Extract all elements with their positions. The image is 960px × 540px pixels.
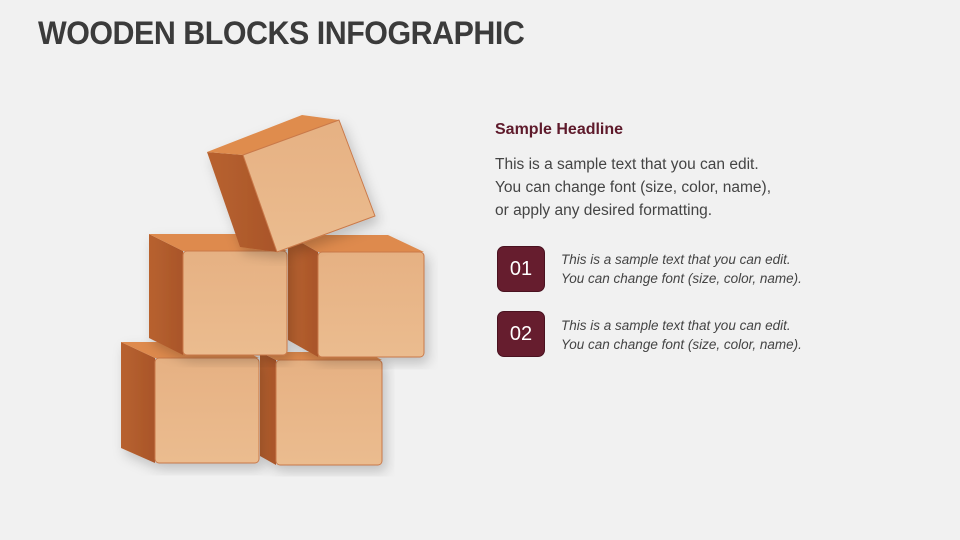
badge 02 — [497, 311, 545, 357]
item 02 — [497, 311, 802, 357]
body text: This is a sample text that you can edit. — [495, 156, 759, 173]
item 01 — [497, 246, 802, 292]
body text: or apply any desired formatting. — [495, 202, 712, 219]
text 02 — [561, 318, 802, 352]
text 01 — [561, 252, 802, 286]
block: middle left — [149, 234, 287, 355]
block: bottom left — [121, 342, 259, 463]
text 01: You can change font (size, color, name). — [561, 271, 802, 286]
badge 02: 02 — [510, 323, 532, 345]
text 01: This is a sample text that you can edit. — [561, 252, 791, 267]
body text — [495, 156, 771, 219]
text 02: You can change font (size, color, name). — [561, 337, 802, 352]
block: bottom right — [260, 352, 382, 465]
title: WOODEN BLOCKS INFOGRAPHIC — [38, 15, 524, 51]
badge 01 — [497, 246, 545, 292]
block: middle right — [288, 235, 424, 357]
headline: Sample Headline — [495, 121, 623, 138]
block: top tilted — [207, 115, 375, 252]
body text: You can change font (size, color, name), — [495, 179, 771, 196]
badge 01: 01 — [510, 258, 532, 280]
text 02: This is a sample text that you can edit. — [561, 318, 791, 333]
